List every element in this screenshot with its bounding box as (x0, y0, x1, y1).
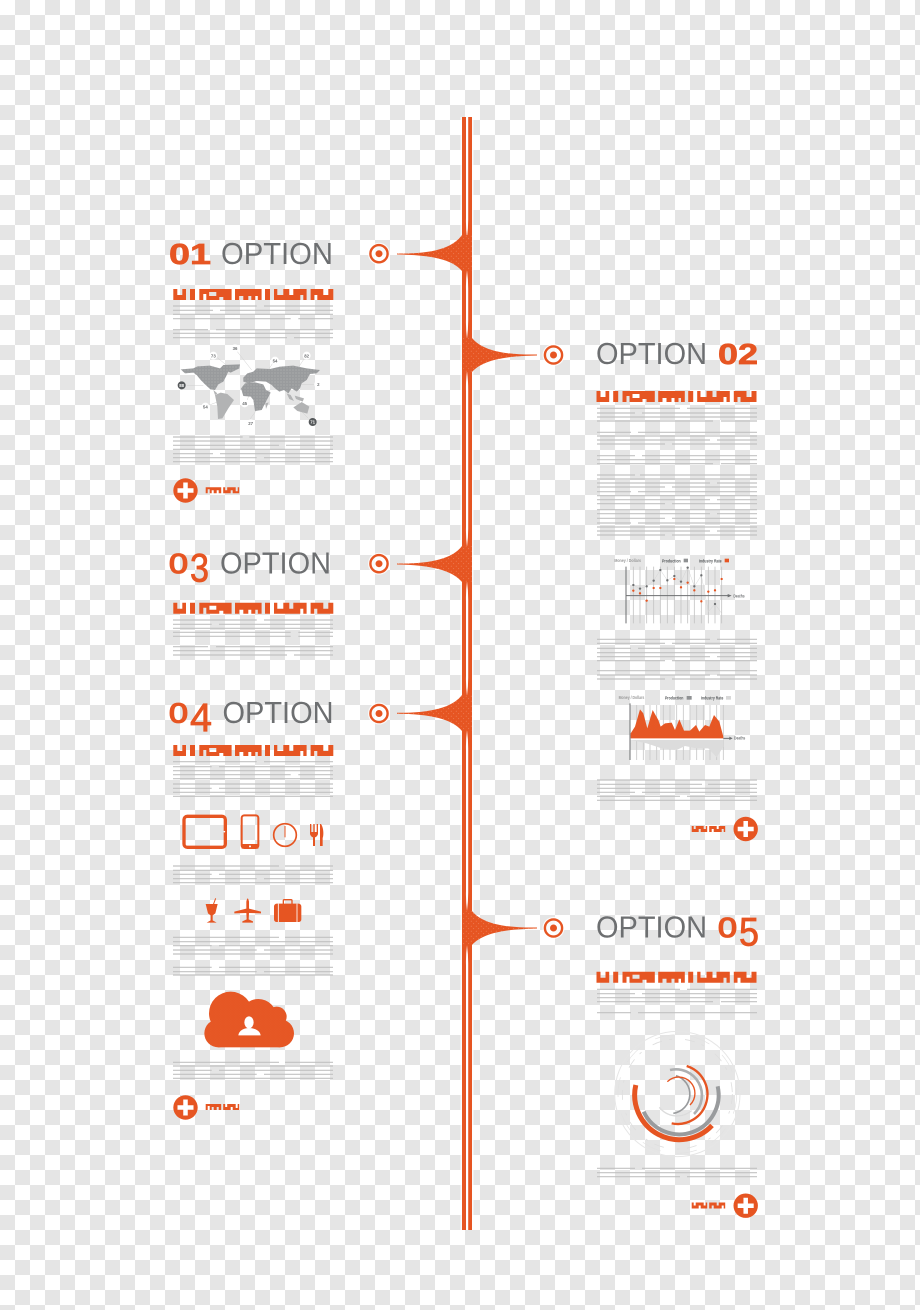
map values: 88 (179, 383, 185, 388)
continents (181, 364, 320, 411)
heading 03: 0 (169, 548, 188, 579)
map values (178, 344, 322, 427)
plus button (734, 1194, 758, 1218)
icon: airplane (234, 898, 261, 923)
panel: option 05 (596, 910, 759, 1218)
orange title bar (596, 972, 756, 983)
area chart (619, 695, 746, 760)
dark series (632, 566, 716, 605)
spike 02 (462, 338, 537, 372)
icon: cloud with person (204, 992, 294, 1047)
body text 1 (597, 408, 757, 535)
panel: option 03 (169, 546, 333, 655)
panel: option 04 (169, 695, 334, 1120)
heading 05: OPTION (596, 910, 707, 944)
panel: option 02 (596, 336, 758, 841)
icon: fork and knife (310, 824, 323, 846)
body text 2 (173, 437, 333, 462)
more link (692, 826, 725, 832)
spike 03 (397, 546, 472, 582)
chart labels: Industry Rate (699, 558, 722, 563)
orange title bar (173, 289, 333, 300)
target marker 01 (368, 243, 390, 265)
scatter chart (614, 558, 745, 623)
chart labels: Industry Rate (701, 695, 724, 700)
spike 01 (397, 235, 472, 271)
body text 2 (597, 639, 757, 679)
map values: 82 (304, 353, 310, 358)
heading 01 (169, 236, 333, 271)
map values: 54 (203, 404, 208, 409)
heading 04: 4 (190, 696, 212, 740)
body text 3 (173, 937, 333, 975)
plus button (734, 817, 758, 841)
icon: tablet (184, 816, 225, 847)
world map (178, 344, 322, 427)
panel: option 01 (169, 236, 333, 503)
chart labels (614, 558, 745, 598)
heading 04: 0 (169, 698, 188, 728)
map values: 54 (273, 358, 278, 363)
more link (692, 1202, 725, 1208)
more link (206, 1104, 239, 1110)
body text 1 (173, 306, 333, 338)
plus button (173, 478, 198, 503)
body text (173, 620, 333, 655)
more link (206, 487, 239, 493)
heading 04 (169, 695, 334, 740)
map values: 71 (310, 420, 316, 425)
map values: 36 (233, 346, 238, 351)
chart labels: Money / Dollars (619, 695, 645, 700)
heading 05: 5 (739, 910, 759, 954)
plus button (173, 1095, 198, 1120)
target marker 03 (368, 553, 390, 575)
spike 05 (462, 911, 537, 945)
orange title bar (173, 603, 333, 614)
spike 04 (397, 695, 472, 731)
map values: 27 (248, 421, 254, 426)
body text 2 (173, 866, 333, 883)
heading 03: 3 (190, 546, 209, 590)
heading 02: 02 (718, 339, 758, 371)
map values: 2 (317, 382, 320, 387)
orange series (632, 578, 723, 602)
orange title bar (173, 745, 333, 756)
chart labels (619, 695, 746, 740)
chart labels: Money / Dollars (614, 558, 641, 563)
icon: wine glass (206, 898, 218, 923)
chart labels: Production (662, 558, 681, 563)
map values: 73 (211, 353, 216, 358)
heading 01: OPTION (221, 236, 333, 271)
radial chart (615, 1031, 740, 1157)
body text 1 (597, 989, 757, 1013)
body text 2 (597, 1168, 757, 1177)
target marker 04 (368, 702, 390, 724)
target marker 02 (542, 344, 564, 366)
body text 1 (173, 762, 333, 796)
heading 01: 01 (169, 239, 211, 271)
icon: phone (242, 815, 258, 849)
timeline (397, 117, 537, 1230)
chart labels: Production (665, 695, 684, 700)
heading 03: OPTION (220, 546, 331, 580)
chart labels: Deaths (733, 593, 745, 598)
map values: 45 (242, 401, 248, 406)
orange title bar (596, 391, 756, 402)
icon: suitcase (274, 900, 301, 922)
heading 03 (169, 546, 331, 590)
body text 4 (173, 1062, 333, 1078)
heading 02: OPTION (596, 336, 707, 371)
icon: clock (274, 824, 296, 846)
icon row 1 (184, 815, 323, 849)
chart labels: Deaths (734, 735, 746, 740)
heading 05 (596, 910, 759, 954)
icon row 2 (206, 898, 301, 923)
body text 3 (597, 780, 757, 800)
target marker 05 (542, 917, 564, 939)
heading 05: 0 (718, 912, 737, 943)
heading 04: OPTION (222, 695, 334, 730)
